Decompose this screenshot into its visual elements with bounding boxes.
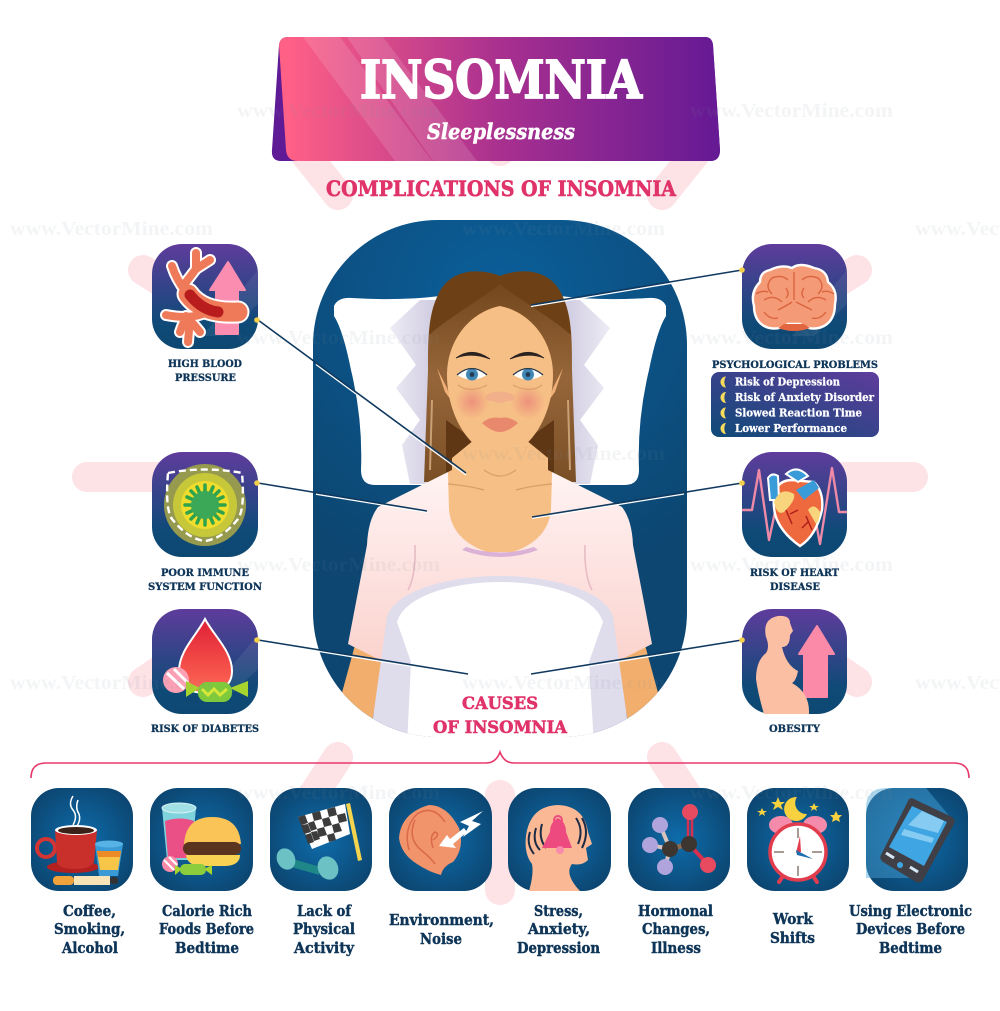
- label: activity: Lack of: [297, 902, 352, 920]
- blanket: [372, 576, 628, 745]
- leader lines: [258, 270, 742, 675]
- watermark text: www.VectorMine.com: [237, 782, 440, 804]
- label: work shifts: [770, 910, 815, 947]
- label: coffee: Smoking,: [54, 920, 125, 938]
- label: stress: Anxiety,: [527, 920, 590, 938]
- watermark text: www.VectorMine.com: [690, 782, 893, 804]
- heading: causes of insomnia: [433, 694, 568, 738]
- icon: obesity: [742, 609, 847, 714]
- watermark text: www.VectorMine.com: [690, 554, 893, 576]
- icon: work shifts clock: [747, 788, 849, 891]
- label: hormonal: Illness: [651, 939, 701, 957]
- subtitle text: Sleeplessness: [427, 119, 575, 144]
- icon: heart disease: [742, 452, 847, 557]
- icon: environment noise: [389, 788, 492, 891]
- watermark text: www.VectorMine.com: [690, 327, 893, 349]
- label: calorie: Bedtime: [175, 939, 239, 957]
- panel: psychological list: [711, 372, 879, 437]
- label: calorie: Calorie Rich: [162, 902, 252, 920]
- label: environment: [389, 911, 494, 948]
- label: calorie: Foods Before: [159, 920, 254, 938]
- watermark text: www.VectorMine.com: [690, 100, 893, 122]
- label: calorie: [159, 902, 254, 957]
- label: poor immune: [148, 567, 262, 593]
- label: risk of heart disease: RISK OF HEART: [750, 567, 839, 579]
- leader dots: [254, 267, 745, 643]
- panel: psychological list: Slowed Reaction Time: [735, 406, 862, 420]
- heading: causes of insomnia: OF INSOMNIA: [433, 718, 568, 738]
- label: high blood pressure: HIGH BLOOD: [168, 358, 242, 370]
- icon: high blood pressure: [152, 244, 258, 349]
- label: activity: Activity: [293, 939, 355, 957]
- label: electronic devices: Devices Before: [856, 920, 965, 938]
- label: stress: Stress,: [534, 902, 583, 920]
- shirt: [348, 472, 652, 662]
- neck and chest: [448, 440, 552, 552]
- watermark text: www.VectorMine.com: [462, 218, 665, 240]
- label: activity: [293, 902, 355, 957]
- background watermark shapes: [87, 145, 913, 890]
- watermark text: www.VectorMine.com: [237, 100, 440, 122]
- label: hormonal: [638, 902, 713, 957]
- panel: psychological list: Risk of Depression: [735, 376, 840, 388]
- watermark text: www.VectorMine.com: [462, 672, 665, 694]
- icon: risk of diabetes: [152, 609, 258, 714]
- label: stress: [517, 902, 600, 957]
- label: risk of heart disease: [750, 567, 839, 593]
- face: [437, 306, 563, 455]
- label: work shifts: Shifts: [770, 929, 815, 947]
- icon: hormonal changes: [628, 788, 730, 891]
- icon: electronic devices phone: [866, 788, 968, 891]
- icon: poor immune system: [152, 452, 258, 557]
- cause labels: [54, 902, 972, 957]
- label: stress: Depression: [517, 939, 600, 957]
- label: coffee: Alcohol: [61, 939, 118, 957]
- title banner: [272, 37, 720, 161]
- icon: coffee smoking alcohol: [31, 788, 133, 891]
- arms: [342, 647, 381, 718]
- label: activity: Physical: [293, 920, 355, 938]
- label: high blood pressure: PRESSURE: [175, 372, 236, 384]
- pillow: [334, 296, 666, 485]
- heading: causes of insomnia: CAUSES: [462, 694, 538, 714]
- label: obesity: OBESITY: [769, 723, 820, 735]
- label: hormonal: Changes,: [642, 920, 710, 938]
- title text: INSOMNIA: [360, 50, 643, 111]
- label: environment: Noise: [420, 930, 462, 948]
- watermark text: www.VectorMine.com: [462, 443, 665, 465]
- label: coffee: [54, 902, 125, 957]
- icon: brain: [742, 244, 847, 349]
- label: high blood pressure: [168, 358, 242, 384]
- label: poor immune: SYSTEM FUNCTION: [148, 581, 262, 593]
- icon: calorie rich foods: [150, 788, 253, 891]
- label: risk of heart disease: DISEASE: [770, 581, 820, 593]
- central illustration: woman in bed: [313, 220, 687, 745]
- watermark text: [10, 100, 1000, 804]
- label: electronic devices: Using Electronic: [849, 902, 972, 920]
- icon: lack of physical activity: [270, 788, 372, 891]
- watermark text: www.VectorMine.com: [237, 327, 440, 349]
- label: environment: Environment,: [389, 911, 494, 929]
- bracket: [31, 752, 969, 778]
- panel: psychological list: Risk of Anxiety Disorder: [735, 391, 874, 404]
- hair: [424, 271, 576, 482]
- label: coffee: Coffee,: [63, 902, 116, 920]
- label: work shifts: Work: [772, 910, 814, 928]
- watermark text: www.VectorMine.com: [10, 218, 213, 240]
- watermark text: www.VectorMine.com: [10, 672, 213, 694]
- label: psychological problems: PSYCHOLOGICAL PROBLEMS: [712, 359, 878, 371]
- panel: psychological list: Lower Performance: [735, 422, 847, 435]
- label: electronic devices: Bedtime: [879, 939, 942, 957]
- label: electronic devices: [849, 902, 972, 957]
- icon: stress anxiety depression: [508, 788, 611, 891]
- label: risk of diabetes: RISK OF DIABETES: [151, 723, 259, 735]
- label: hormonal: Hormonal: [638, 902, 713, 920]
- heading: complications: COMPLICATIONS OF INSOMNIA: [326, 176, 677, 201]
- label: poor immune: POOR IMMUNE: [161, 567, 249, 579]
- watermark text: www.VectorMine.com: [237, 554, 440, 576]
